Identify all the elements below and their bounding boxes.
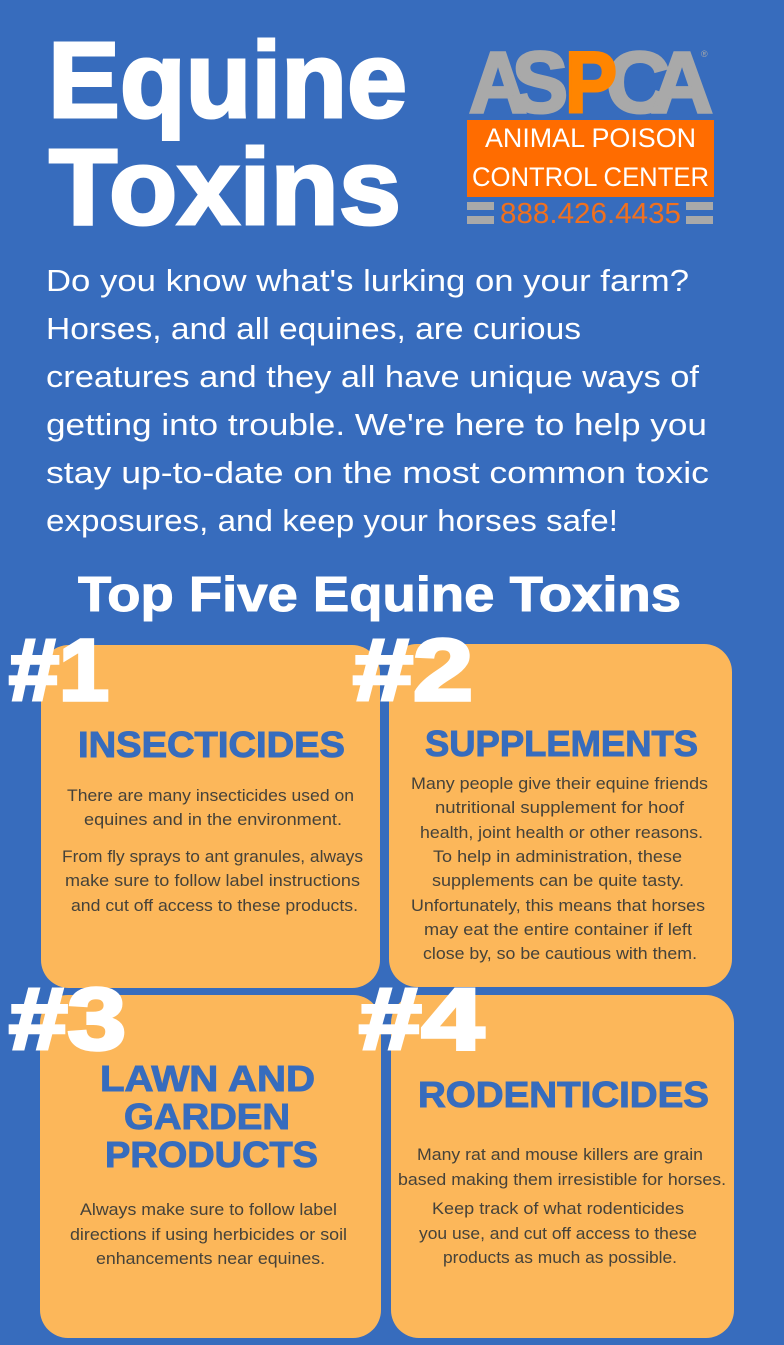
logo orange banner: ANIMAL POISON	[485, 123, 696, 153]
panel text	[398, 1145, 726, 1267]
panel text: health, joint health or other reasons.	[420, 823, 703, 842]
rank number 1: #1	[9, 622, 109, 719]
panel text	[62, 786, 363, 915]
title: Equine	[48, 19, 407, 140]
panel text: directions if using herbicides or soil	[70, 1225, 347, 1244]
intro text: stay up-to-date on the most common toxic	[46, 455, 709, 490]
intro text: Do you know what's lurking on your farm?	[46, 263, 689, 298]
logo wordmark: ®	[701, 49, 708, 59]
title: Toxins	[49, 126, 401, 247]
panel text: From fly sprays to ant granules, always	[62, 847, 363, 866]
rank number 2: #2	[353, 622, 473, 719]
panel text: There are many insecticides used on	[67, 786, 354, 805]
panel text: To help in administration, these	[433, 847, 682, 866]
intro text: exposures, and keep your horses safe!	[46, 503, 618, 538]
panel text: nutritional supplement for hoof	[435, 798, 684, 817]
panel heading: INSECTICIDES	[78, 724, 345, 765]
panel: rodenticides	[359, 971, 734, 1338]
panel text: you use, and cut off access to these	[419, 1224, 697, 1243]
panel text: and cut off access to these products.	[71, 896, 358, 915]
panel heading: GARDEN	[124, 1096, 290, 1137]
intro text: getting into trouble. We're here to help you	[46, 407, 707, 442]
logo phone number: 888.426.4435	[500, 198, 681, 230]
logo wordmark: S	[512, 35, 568, 131]
section heading: Top Five Equine Toxins	[78, 568, 681, 622]
panel: insecticides	[9, 622, 380, 988]
panel text: Keep track of what rodenticides	[432, 1199, 684, 1218]
panel heading: RODENTICIDES	[418, 1074, 709, 1115]
panel text: make sure to follow label instructions	[65, 871, 360, 890]
panel: supplements	[353, 622, 732, 987]
logo wordmark: A	[651, 35, 713, 131]
logo orange banner	[467, 120, 714, 197]
panel: lawn and garden products	[9, 971, 381, 1338]
panel heading: SUPPLEMENTS	[425, 723, 698, 764]
panel text: Many people give their equine friends	[411, 774, 708, 793]
panel text: may eat the entire container if left	[424, 920, 692, 939]
title	[48, 19, 407, 247]
panel heading: LAWN AND	[100, 1058, 315, 1099]
logo wordmark	[469, 35, 713, 131]
intro text	[46, 263, 709, 538]
logo wordmark: P	[565, 35, 617, 131]
logo orange banner: CONTROL CENTER	[472, 162, 709, 192]
panel text: supplements can be quite tasty.	[432, 871, 684, 890]
panel text: Many rat and mouse killers are grain	[417, 1145, 703, 1164]
logo wordmark: C	[606, 35, 670, 131]
panel text	[70, 1200, 347, 1268]
panel text: Unfortunately, this means that horses	[411, 896, 705, 915]
panel text: based making them irresistible for horses.	[398, 1170, 726, 1189]
intro text: creatures and they all have unique ways of	[46, 359, 699, 394]
logo wordmark: A	[469, 35, 527, 131]
rank number 3: #3	[9, 971, 126, 1068]
panel text: equines and in the environment.	[84, 810, 342, 829]
panel heading: PRODUCTS	[105, 1134, 318, 1175]
panel text: products as much as possible.	[443, 1248, 677, 1267]
ASPCA logo	[467, 35, 714, 230]
panel text: Always make sure to follow label	[80, 1200, 337, 1219]
panel heading	[100, 1058, 318, 1175]
panel text: enhancements near equines.	[96, 1249, 325, 1268]
intro text: Horses, and all equines, are curious	[46, 311, 581, 346]
rank number 4: #4	[359, 971, 484, 1068]
panel text	[411, 774, 708, 963]
panel text: close by, so be cautious with them.	[423, 944, 697, 963]
